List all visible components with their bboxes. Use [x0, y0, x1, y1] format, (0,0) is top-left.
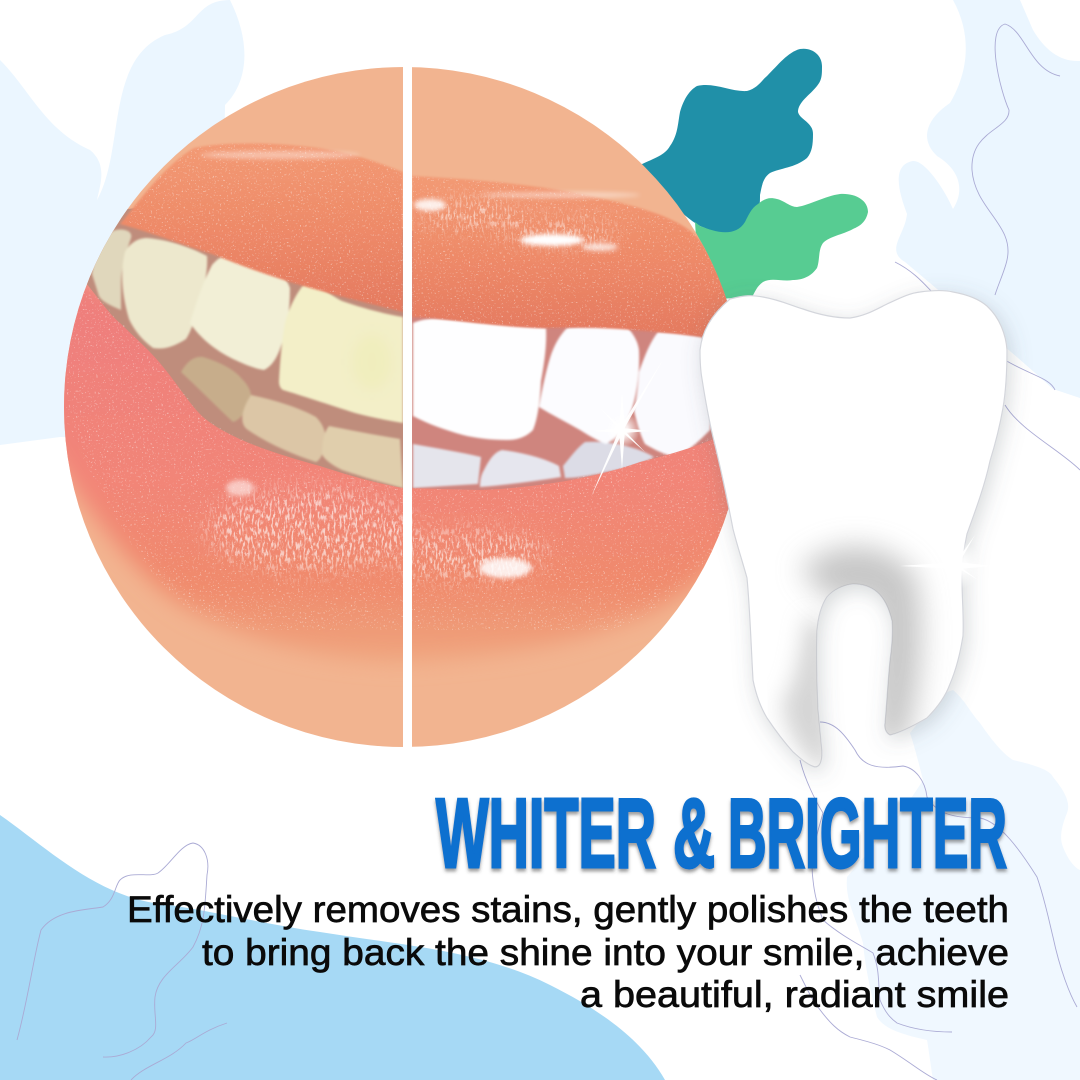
upper lip [120, 143, 403, 312]
title: WHITER [436, 778, 656, 888]
left teeth: stained [92, 229, 403, 488]
background: lower right pale blob [847, 690, 1080, 1080]
background: bottom-left blue shape [0, 815, 665, 1080]
icon: white molar tooth [700, 290, 1007, 775]
tooth: root shading [782, 546, 922, 775]
description text [127, 889, 1009, 1015]
lip highlights [200, 151, 640, 578]
lip gloss speckle [60, 130, 760, 630]
description text: Effectively removes stains, gently polishes the teeth [127, 889, 1009, 930]
description text: to bring back the shine into your smile, achieve [202, 932, 1009, 973]
blob: green splash [695, 194, 868, 300]
sparkle on white teeth [591, 400, 644, 496]
tooth: sparkle [900, 530, 992, 600]
background: pale blue blobs [0, 0, 1080, 445]
description text: a beautiful, radiant smile [580, 974, 1009, 1015]
right teeth: white [413, 319, 711, 488]
mouth interior with teeth [87, 208, 727, 490]
title: & [673, 778, 715, 888]
blob: teal splash [640, 49, 822, 233]
lower lip [64, 278, 728, 664]
divider: white vertical bar [403, 62, 412, 752]
lip gloss streaks [194, 188, 625, 594]
photo: before and after smile [64, 67, 728, 747]
title [436, 778, 1007, 888]
